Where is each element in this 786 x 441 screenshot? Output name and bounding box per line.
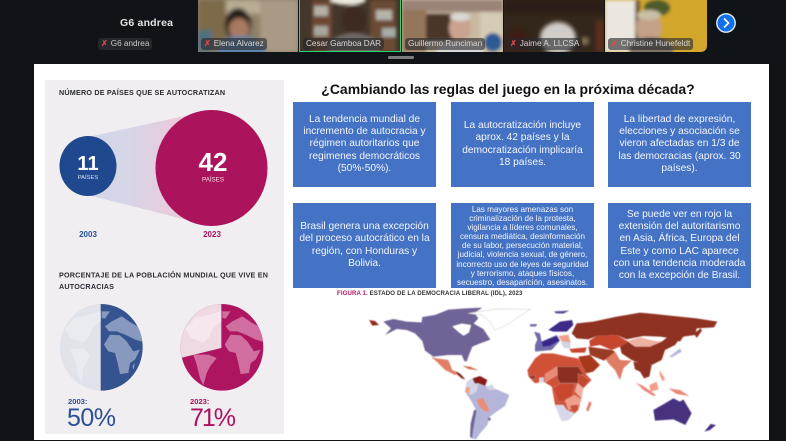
- video tile: Elena Alvarez: [198, 0, 298, 52]
- text box 5: [451, 203, 594, 288]
- text box 4: región, con Honduras y: [312, 246, 417, 256]
- host name: G6 andrea: [120, 17, 173, 29]
- video tile: Elena Alvarez: ✗ Elena Alvarez: [204, 39, 264, 48]
- bubble chart: countries autocratizing: [60, 110, 268, 239]
- text box 4: del proceso autocrático en la: [299, 233, 430, 244]
- scroll handle: [388, 56, 414, 58]
- text box 6: [608, 203, 751, 288]
- text box 2: La autocratización incluye: [464, 120, 581, 131]
- host name tag: ✗ G6 andrea: [101, 39, 149, 48]
- bubble: 2023: 42: [199, 147, 227, 177]
- text box 3: La libertad de expresión,: [624, 114, 735, 125]
- text box 3: países).: [661, 163, 698, 174]
- year label 2003: 2003: [79, 230, 97, 239]
- video tile: Jaime A. LLCSA: ✗ Jaime A. LLCSA: [510, 39, 579, 48]
- text box 1: La tendencia mundial de: [309, 114, 420, 125]
- slide: [34, 64, 769, 440]
- map: Africa: [527, 353, 592, 421]
- globe chart: 2023: [180, 304, 264, 391]
- text box 4: [293, 203, 436, 288]
- map: North America: [369, 308, 490, 375]
- text box 3: las democracias (aprox. 30: [618, 151, 741, 162]
- next page button: [716, 13, 736, 33]
- text box 5: vigilancia a líderes comunales,: [467, 223, 578, 232]
- text box 6: con una tendencia moderada: [614, 258, 745, 269]
- text box 3: vieron afectadas en 1/3 de: [619, 138, 740, 149]
- globe chart: 2003: [60, 304, 143, 391]
- text box 4: Bolivia.: [348, 258, 381, 269]
- video tile: Guillermo Runciman: [402, 0, 503, 52]
- text box 5: criminalización de la protesta,: [469, 214, 576, 223]
- text box 4: Brasil genera una excepción: [300, 221, 429, 232]
- text box 5: secuestro, desaparición, asesinatos.: [457, 278, 588, 287]
- video tile: Guillermo Runciman: Guillermo Runciman: [408, 39, 482, 48]
- text box 2: 18 países.: [499, 157, 546, 168]
- text box 6: en Asia, África, Europa del: [619, 233, 740, 244]
- text box 6: extensión del autoritarismo: [619, 221, 740, 232]
- video tile: Christine Hunefeldt: [605, 0, 707, 52]
- text box 1: (50%-50%).: [338, 163, 391, 174]
- map: Europe, Asia and Oceania: [530, 311, 717, 432]
- video tile: Christine Hunefeldt: ✗ Christine Hunefeldt: [611, 39, 690, 48]
- text box 5: censura mediática, desinformación: [460, 232, 585, 241]
- text box 6: con la excepción de Brasil.: [619, 270, 740, 281]
- figure caption: FIGURA 1. ESTADO DE LA DEMOCRACIA LIBERAL (IDL), 2023: [337, 290, 523, 297]
- text box 6: Se puede ver en rojo la: [627, 209, 732, 220]
- text box 5: Las mayores amenazas son: [472, 205, 573, 214]
- bubble: 2023: PAÍSES: [202, 176, 224, 184]
- text box 1: incremento de autocracia y: [303, 126, 426, 137]
- heading: number of countries: NÚMERO DE PAÍSES QUE SE AUTOCRATIZAN: [59, 88, 225, 97]
- value 2023: 71%: 2023:: [190, 397, 209, 406]
- text box 5: incorrecto uso de leyes de seguridad: [456, 260, 589, 269]
- text box 5: de su labor, persecución material,: [462, 241, 583, 250]
- video tile: Jaime A. LLCSA: [504, 0, 604, 52]
- value 2003: 50%: 2003:: [68, 397, 87, 406]
- text box 1: régimen autoritarios que: [310, 138, 419, 149]
- bubble: 2003: 11: [77, 153, 99, 175]
- video tile: Cesar Gamboa DAR: Cesar Gamboa DAR: [306, 39, 381, 48]
- bubble: 2003: [60, 136, 116, 196]
- text box 3: [608, 102, 751, 187]
- slide title: ¿Cambiando las reglas del juego en la próxima década?: [321, 81, 695, 97]
- panel: infographic: [45, 80, 284, 434]
- text box 5: y terrorismo, ataques físicos,: [471, 269, 574, 278]
- video tile: Cesar Gamboa DAR: [299, 0, 401, 52]
- text box 5: judicial, violencia sexual, de género,: [458, 250, 587, 259]
- text box 3: elecciones y asociación se: [619, 126, 740, 137]
- heading line 2: AUTOCRACIAS: [59, 282, 114, 291]
- value 2003: 50%: 50%: [67, 404, 116, 432]
- text box 1: [293, 102, 436, 187]
- year label 2023: 2023: [203, 230, 221, 239]
- heading: population percentage: PORCENTAJE DE LA POBLACIÓN MUNDIAL QUE VIVE EN: [59, 270, 268, 280]
- host name tag: [98, 38, 152, 50]
- bubble: 2003: PAÍSES: [78, 174, 98, 181]
- text box 6: Este y como LAC aparece: [620, 246, 739, 256]
- text box 2: aprox. 42 países y la: [475, 132, 570, 143]
- bubble: 2023: [156, 110, 268, 226]
- text box 1: regimenes democráticos: [309, 151, 420, 162]
- text box 2: [451, 102, 594, 187]
- text box 2: democratización implicaría: [462, 144, 583, 156]
- map: Central and South America: [456, 309, 530, 439]
- value 2023: 71%: 71%: [190, 404, 236, 432]
